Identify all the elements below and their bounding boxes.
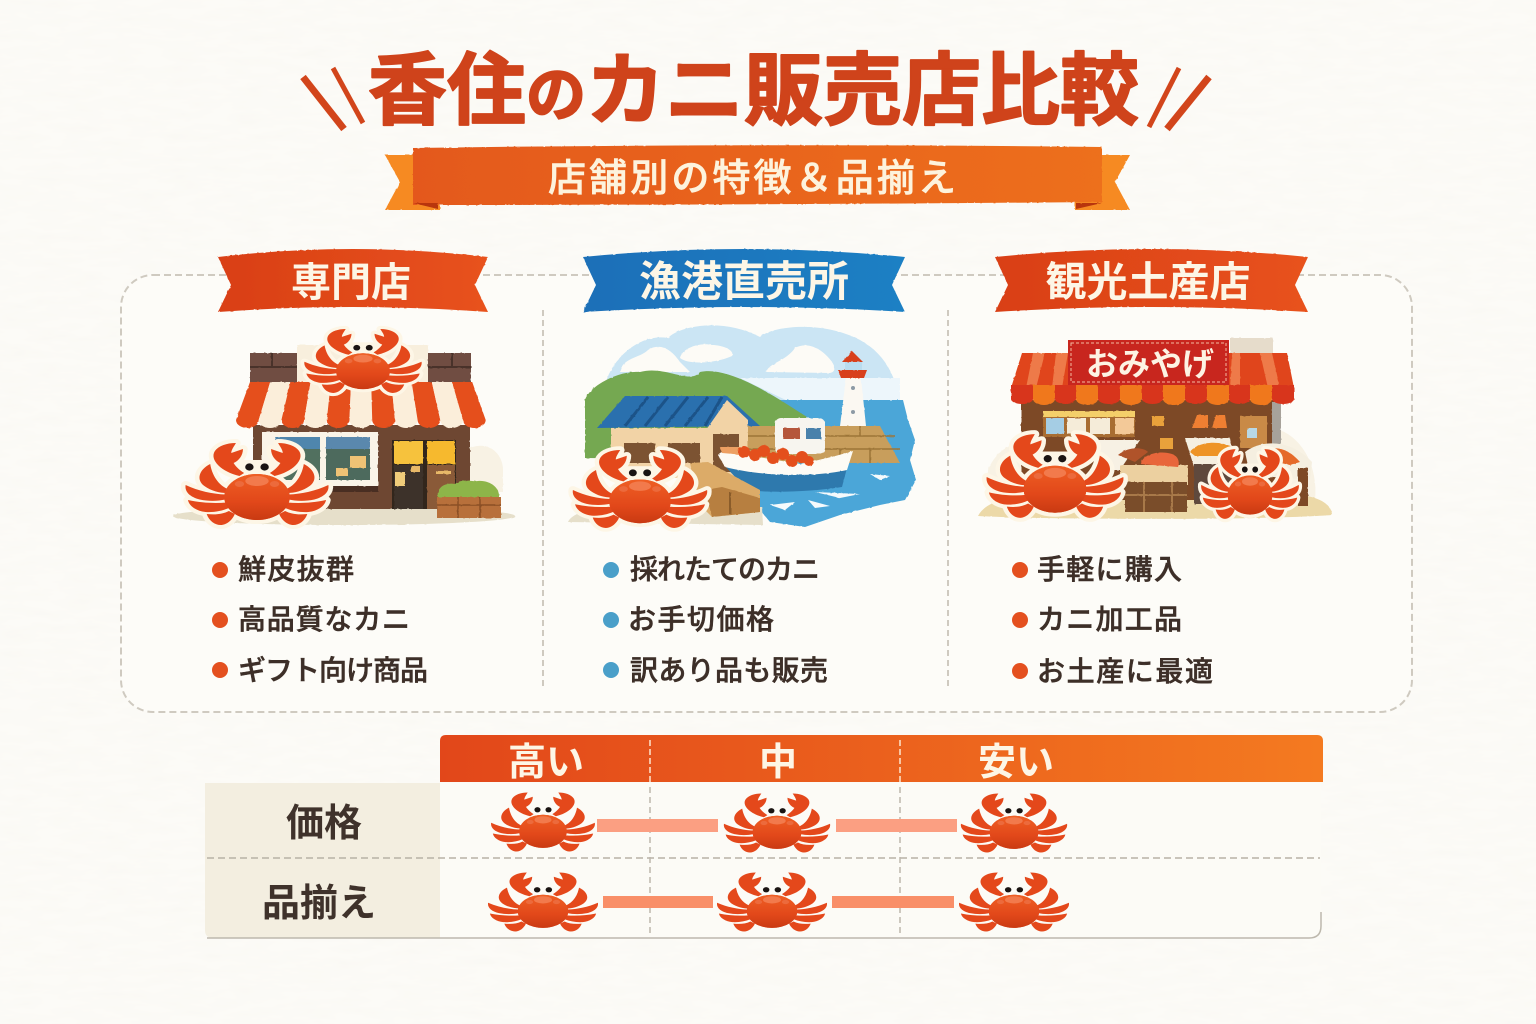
price row: crabs and bars [491, 792, 1067, 853]
subtitle ribbon: 店舗別の特徴＆品揃え [548, 158, 956, 200]
feature list: fishing port: 訳あり品も販売 [630, 655, 828, 686]
feature list: specialty store: ギフト向け商品 [238, 655, 428, 686]
feature list: souvenir shop: お土産に最適 [1037, 656, 1213, 687]
heading ribbon: specialty store [218, 249, 488, 312]
table header: 高い [508, 742, 584, 784]
table header [440, 735, 1323, 784]
feature list: specialty store: 高品質なカニ [238, 604, 410, 635]
feature list: specialty store [212, 554, 428, 686]
row label: price: 価格 [286, 803, 362, 845]
sign: omiyage [1068, 340, 1229, 385]
feature list: souvenir shop [1012, 554, 1213, 687]
icon: crab on sign [304, 329, 422, 393]
feature list: fishing port: お手切価格 [628, 604, 774, 635]
feature list: fishing port [603, 554, 828, 686]
feature list: fishing port: 採れたてのカニ [630, 554, 820, 585]
panel: tourist souvenir shop [978, 249, 1332, 687]
title: カニ販売店比較 [586, 46, 1139, 135]
accent lines right of title [1149, 68, 1209, 129]
comparison table [205, 735, 1323, 938]
awning stripes [236, 382, 486, 428]
panel: fishing port direct sales [568, 249, 916, 686]
illustration: harbor [568, 325, 916, 528]
icon: crab in front of shop [185, 443, 329, 525]
table header: 安い [978, 742, 1054, 784]
illustration: souvenir shop [978, 338, 1332, 519]
comparison panel frame [121, 275, 1412, 712]
feature list: souvenir shop: 手軽に購入 [1037, 554, 1182, 585]
heading ribbon: souvenir shop: 観光土産店 [1046, 259, 1250, 305]
feature list: specialty store: 鮮皮抜群 [238, 554, 354, 585]
icon: large crab [987, 434, 1123, 518]
sign: omiyage: おみやげ [1086, 346, 1214, 382]
panel: specialty store [173, 249, 515, 686]
selection row: crabs and bars [488, 872, 1069, 932]
title: の [526, 62, 586, 129]
heading ribbon: souvenir shop [995, 249, 1308, 312]
heading ribbon: specialty store: 専門店 [291, 261, 411, 305]
row label column [205, 783, 440, 938]
heading ribbon: fishing port: 漁港直売所 [639, 258, 849, 305]
illustration: crab shop [173, 329, 515, 525]
table body [205, 783, 1321, 938]
icon: small crab [1201, 449, 1299, 519]
subtitle ribbon [385, 145, 1130, 210]
table header: 中 [759, 742, 797, 784]
accent lines left of title [303, 68, 363, 129]
title: 香住 [368, 46, 526, 135]
awning scallops [1011, 385, 1294, 405]
feature list: souvenir shop: カニ加工品 [1037, 604, 1182, 635]
icon: crab on dock [573, 450, 707, 528]
row label: selection: 品揃え [262, 883, 376, 925]
heading ribbon: fishing port [583, 249, 905, 312]
